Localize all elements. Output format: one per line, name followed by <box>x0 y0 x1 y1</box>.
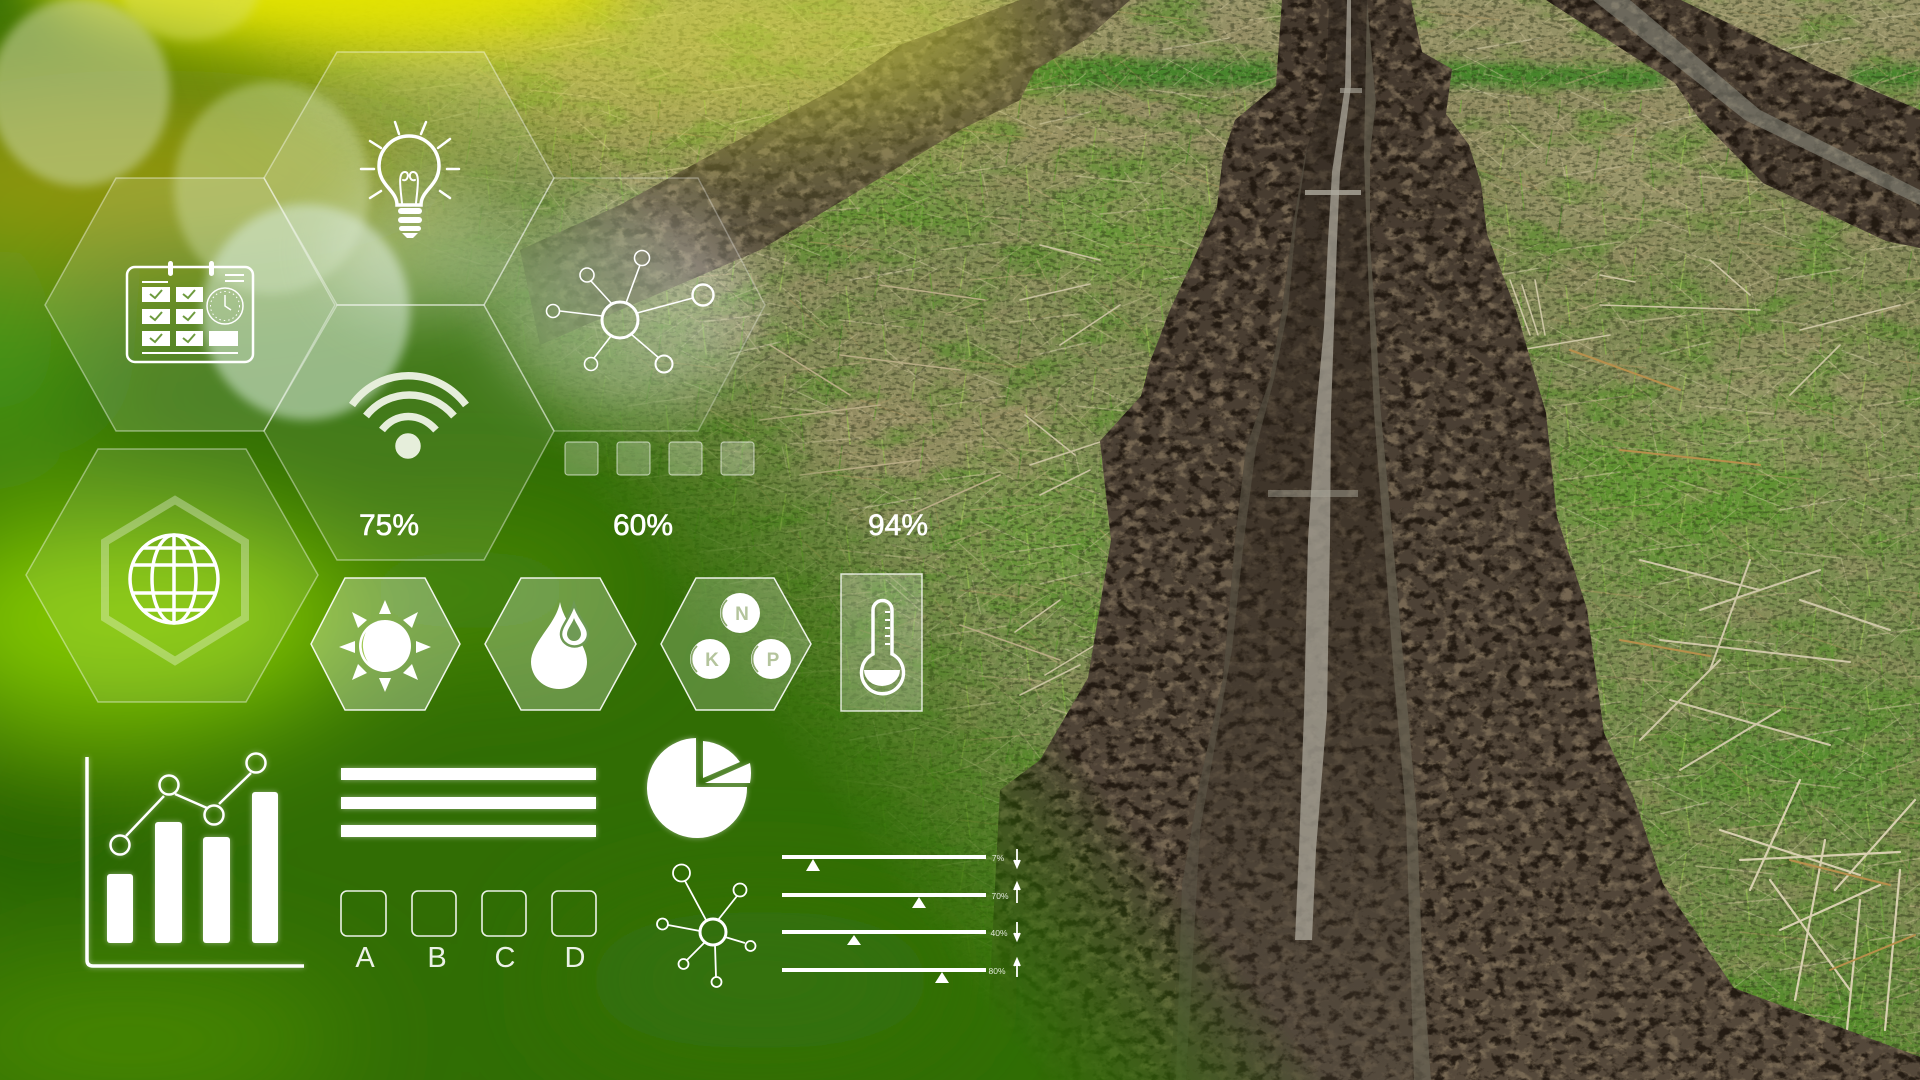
hexagon: wifi <box>264 305 554 560</box>
hexagon: NKP nutrients <box>661 578 811 710</box>
icon: calendar with clock <box>127 261 253 362</box>
A B C D option boxes: B <box>427 942 447 974</box>
A B C D option boxes: A <box>355 942 375 974</box>
icon: light bulb <box>361 122 459 238</box>
icon: water drops <box>531 602 588 689</box>
bokeh circles <box>0 0 750 420</box>
A B C D option boxes: C <box>495 942 515 974</box>
shield hexagon <box>105 500 245 661</box>
soil banks <box>520 0 1920 1080</box>
hexagon: light bulb <box>264 52 554 305</box>
icon: wifi <box>352 376 466 455</box>
slider 7% <box>782 849 1020 871</box>
top yellow glow <box>30 0 1040 130</box>
A B C D option boxes <box>341 891 596 974</box>
centre ditch <box>1172 0 1431 1080</box>
white marker line <box>1268 0 1362 940</box>
slider gauges <box>782 849 1020 983</box>
three text bars <box>341 768 596 837</box>
network diagram lower <box>657 864 756 987</box>
A B C D option boxes: D <box>565 942 585 974</box>
right furrow wall <box>1593 0 1920 205</box>
icon: sun <box>339 600 431 692</box>
slider 40%: 40% <box>990 928 1008 938</box>
60 percent label: 60% <box>613 509 673 542</box>
icon: N K P circles: P <box>767 650 780 671</box>
panel: thermometer <box>841 574 922 711</box>
icon: N K P circles: K <box>705 650 719 671</box>
slider 70% <box>782 883 1020 908</box>
icon: globe <box>130 535 218 623</box>
straw clusters <box>760 245 1915 1050</box>
slider 7%: 7% <box>992 853 1005 863</box>
green gradient overlay with bokeh <box>0 0 1287 1080</box>
colour glows <box>0 70 960 1080</box>
pie chart <box>647 738 751 838</box>
hexagon: network <box>484 178 765 431</box>
slider 70%: 70% <box>991 891 1009 901</box>
icon: thermometer <box>862 600 904 694</box>
icon: N K P circles: N <box>735 604 749 625</box>
hexagon: calendar <box>45 178 335 431</box>
slider 80% <box>782 959 1020 983</box>
slider 80%: 80% <box>988 966 1006 976</box>
bar and line chart <box>87 754 304 966</box>
small level squares <box>565 442 754 475</box>
slider 40% <box>782 922 1020 945</box>
94 percent label: 94% <box>868 509 928 542</box>
left furrow lightened by haze <box>520 0 1130 345</box>
75 percent label: 75% <box>359 509 419 542</box>
icon: network nodes <box>546 250 714 372</box>
hexagon: sun <box>311 578 460 710</box>
icon: N K P circles <box>690 593 791 679</box>
hexagon: globe <box>26 449 318 702</box>
hexagon: water drop <box>485 578 636 710</box>
